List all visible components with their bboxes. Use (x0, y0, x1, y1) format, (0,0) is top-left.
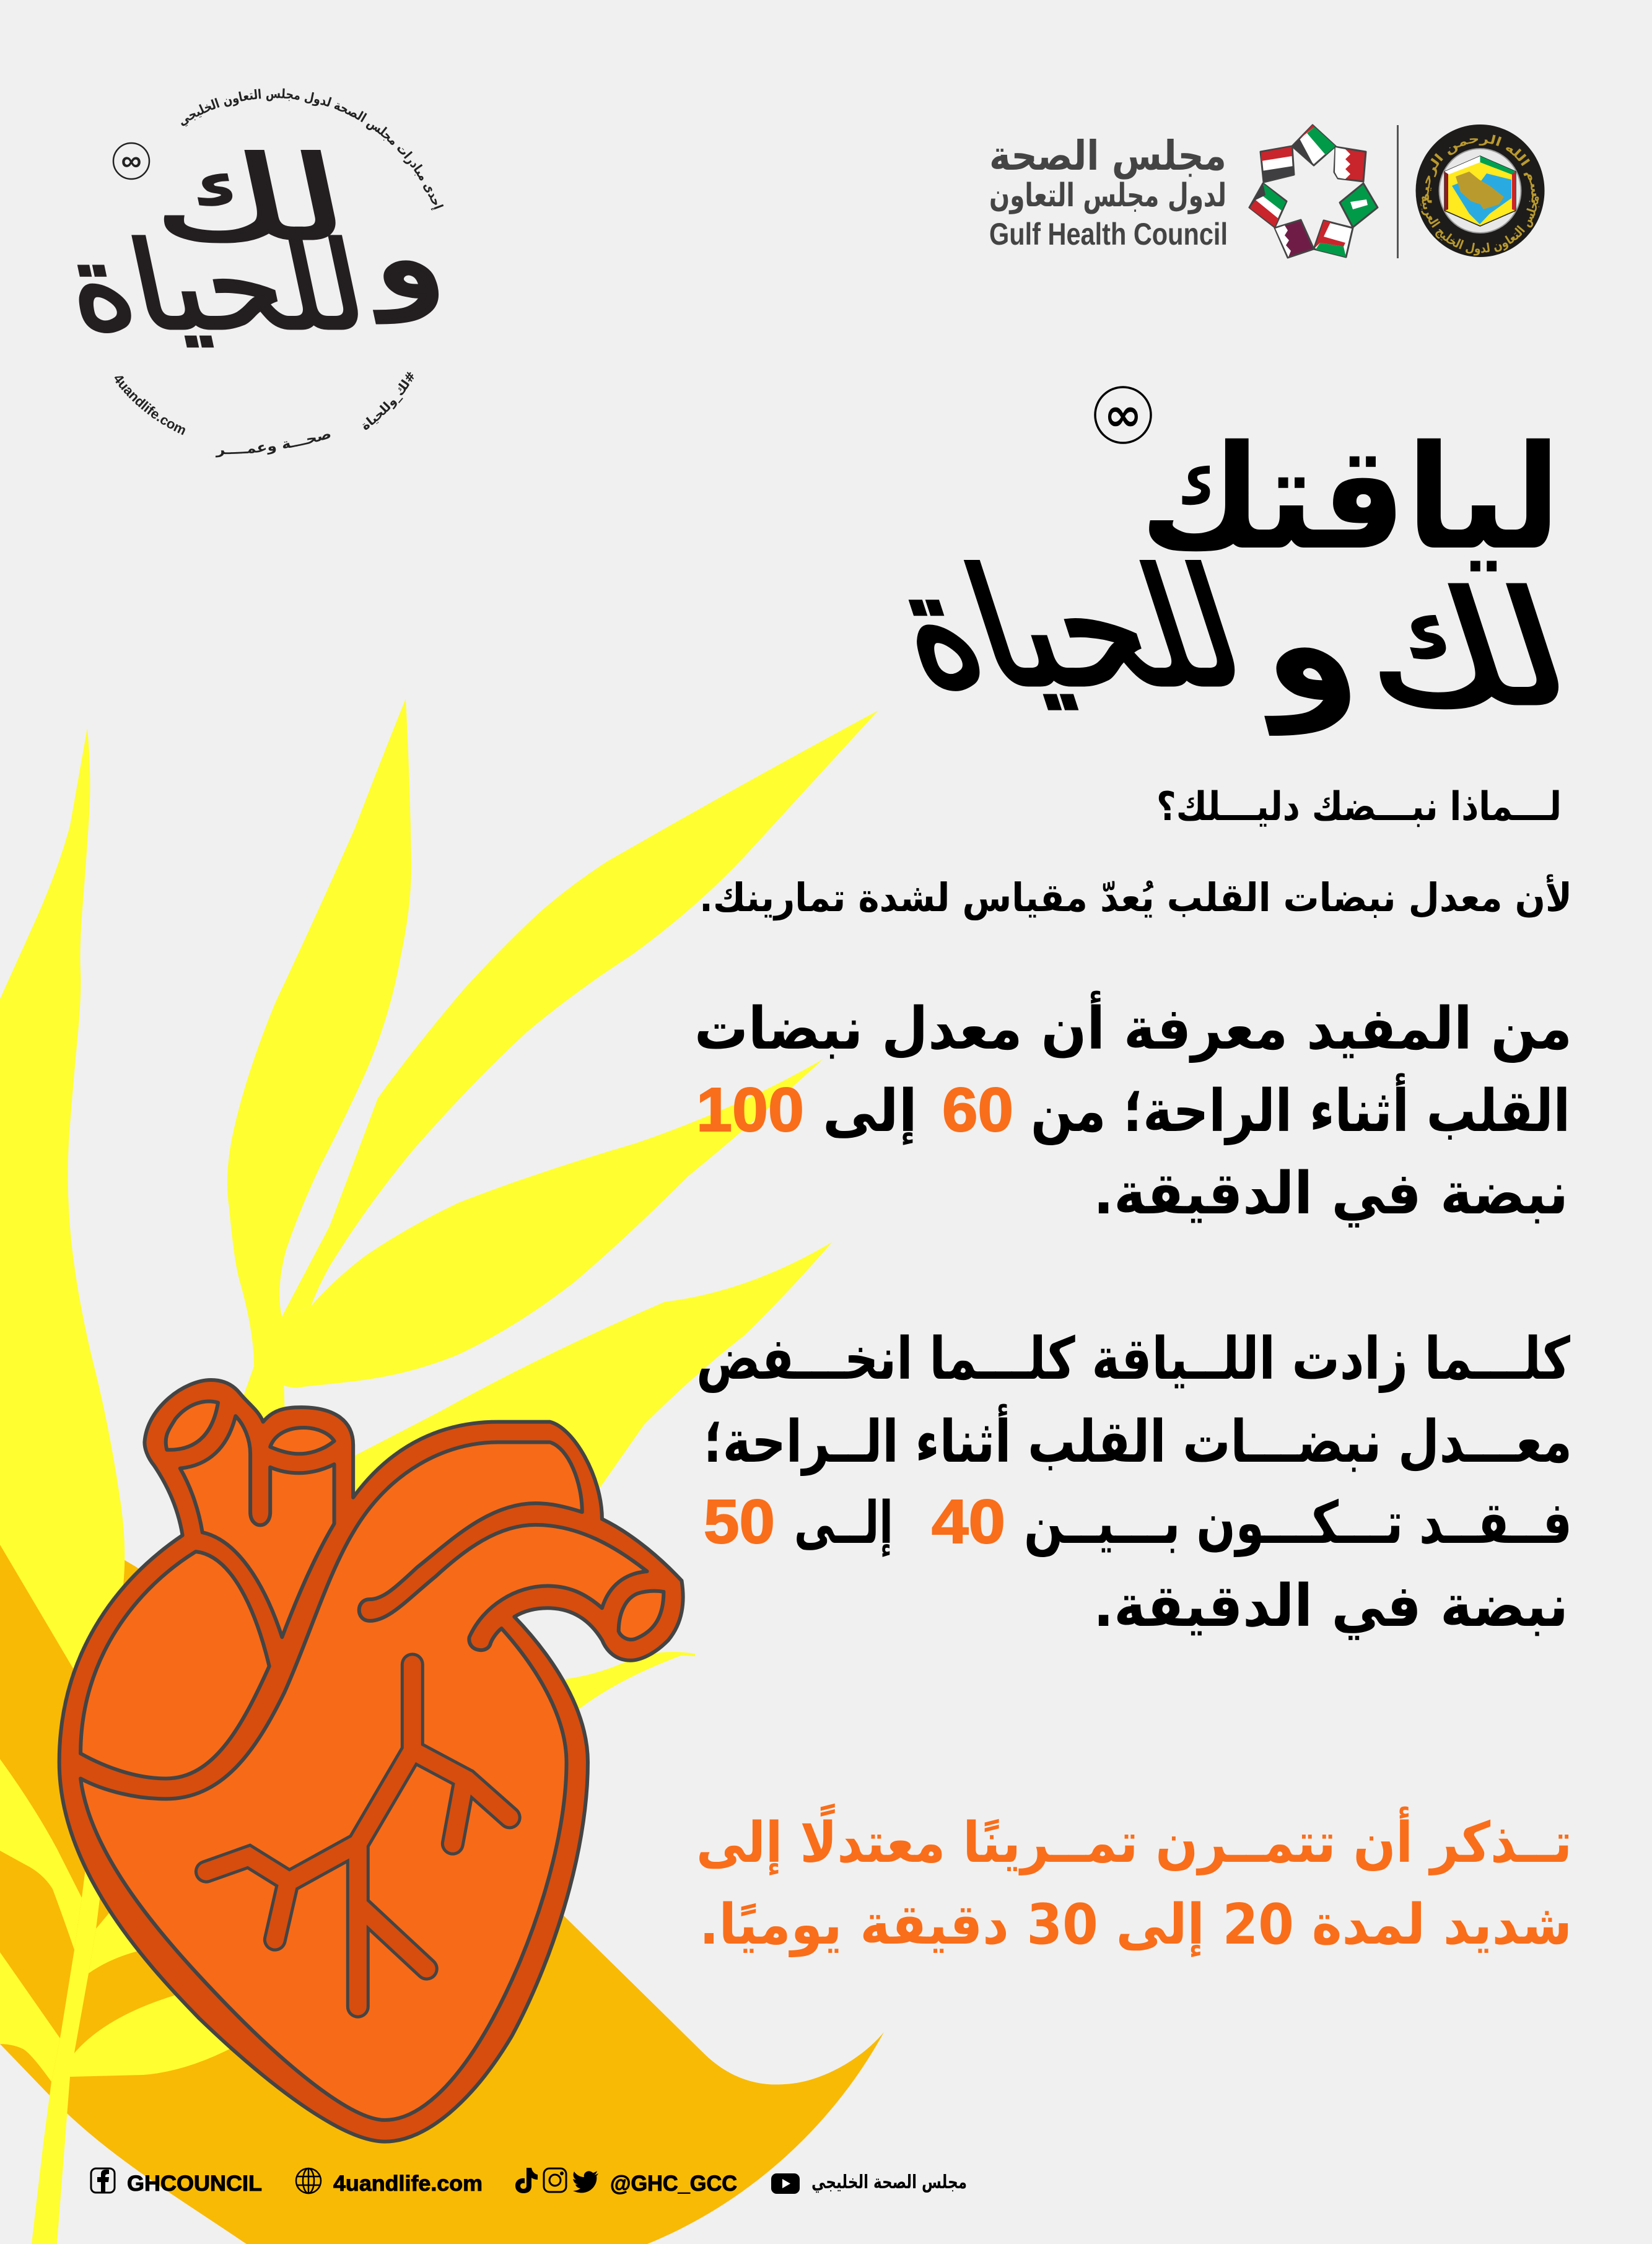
council name english: Gulf Health Council (989, 217, 1228, 251)
paragraph: fitness lowers heart rate: إلــى (794, 1490, 893, 1557)
heart illustration (59, 1380, 683, 2142)
callout: exercise reminder: شديد لمدة 20 إلى 30 دقيقة يوميًا. (699, 1892, 1572, 1957)
flag Oman (1314, 220, 1353, 257)
curved slogan text: صحـــة وعمــــر (216, 434, 331, 457)
flag Saudi Arabia (1340, 183, 1378, 227)
curved initiative text: إحدى مبادرات مجلس الصحة لدول مجلس التعاون الخليجي (181, 88, 444, 211)
infinity mark (113, 143, 149, 179)
logo: Gulf Health Council (989, 132, 1228, 251)
flag Kuwait (1249, 183, 1287, 227)
infinity mark (1095, 387, 1151, 443)
paragraph: resting heart rate: القلب أثناء الراحة؛ من (1031, 1073, 1570, 1145)
title line 2: for you and for life: للحياة (872, 535, 1265, 722)
council name arabic line 2: لدول مجلس التعاون (989, 177, 1226, 214)
upper vessels (180, 1416, 334, 1637)
icon: instagram (544, 2168, 566, 2192)
website address: 4uandlife.com (333, 2172, 483, 2196)
title line 2: for you and for life: و (1230, 562, 1370, 733)
callout: exercise reminder (696, 1803, 1572, 1957)
background orange leaf shape (0, 1487, 884, 2244)
yellow plant illustration (0, 699, 878, 2244)
flag Qatar (1275, 220, 1314, 258)
curved website text: 4uandlife.com (114, 376, 185, 435)
logo wordmark (54, 133, 453, 357)
flag UAE (1292, 125, 1335, 165)
icon: globe (296, 2168, 321, 2193)
logo wordmark: للحياة (54, 216, 378, 357)
paragraph: resting heart rate: نبضة في الدقيقة. (1093, 1160, 1568, 1228)
vessel openings (166, 1402, 218, 1450)
emblem text top: بسم الله الرحمن الرحيم (1425, 135, 1536, 203)
curved hashtag text: ‏#لك_وللحياة (363, 372, 414, 430)
icon: youtube (771, 2173, 800, 2194)
right atrium (81, 1552, 269, 1778)
paragraph: resting heart rate: 100 (696, 1075, 804, 1145)
paragraph: resting heart rate: إلى (823, 1078, 917, 1145)
callout: exercise reminder: تــذكر أن تتمــرن تمــرينًا معتدلًا إلى (696, 1803, 1572, 1875)
logo wordmark: لك (136, 133, 359, 266)
council name arabic line 1: مجلس الصحة (989, 132, 1226, 180)
title line 2: for you and for life (872, 535, 1591, 740)
icon: six flags star (1249, 125, 1378, 258)
title line 1: fitness: لياقتك (1140, 414, 1561, 582)
infinity mark: ∞ (1104, 388, 1142, 442)
icon: tiktok (515, 2168, 538, 2193)
emblem text bottom: مجلس التعاون لدول الخليج العربية (1420, 196, 1540, 255)
paragraph: fitness lowers heart rate: نبضة في الدقيقة. (1093, 1573, 1568, 1640)
subheading: لـــماذا نبـــضك دليـــلك؟ (1156, 784, 1562, 830)
title (872, 387, 1591, 740)
paragraph: resting heart rate: 60 (942, 1075, 1013, 1145)
flag Yemen (1261, 146, 1294, 182)
paragraph: fitness lowers heart rate: 50 (704, 1487, 775, 1556)
twitter handle: @GHC_GCC (610, 2172, 737, 2196)
ventricle and aorta (81, 1442, 647, 2120)
icon: twitter (573, 2171, 598, 2193)
icon: GCC emblem (1416, 124, 1545, 257)
icon: facebook (91, 2168, 115, 2193)
youtube channel name: مجلس الصحة الخليجي (811, 2172, 967, 2193)
infinity mark: ∞ (121, 144, 141, 177)
paragraph: resting heart rate: من المفيد معرفة أن معدل نبضات (694, 991, 1572, 1063)
coronary arteries (206, 1664, 510, 2007)
logo: lak wa lil hayat circular badge (54, 88, 453, 457)
intro text: لأن معدل نبضات القلب يُعدّ مقياس لشدة تمارينك. (699, 874, 1572, 920)
flag Bahrain (1334, 147, 1366, 181)
paragraph: resting heart rate (694, 991, 1572, 1228)
footer social links (91, 2168, 967, 2196)
paragraph: fitness lowers heart rate (696, 1325, 1572, 1640)
facebook handle: GHCOUNCIL (127, 2172, 262, 2196)
logo wordmark: و (352, 198, 453, 322)
heart outer silhouette (59, 1380, 683, 2142)
title line 2: for you and for life: لك (1332, 560, 1591, 740)
paragraph: fitness lowers heart rate: 40 (932, 1487, 1005, 1556)
